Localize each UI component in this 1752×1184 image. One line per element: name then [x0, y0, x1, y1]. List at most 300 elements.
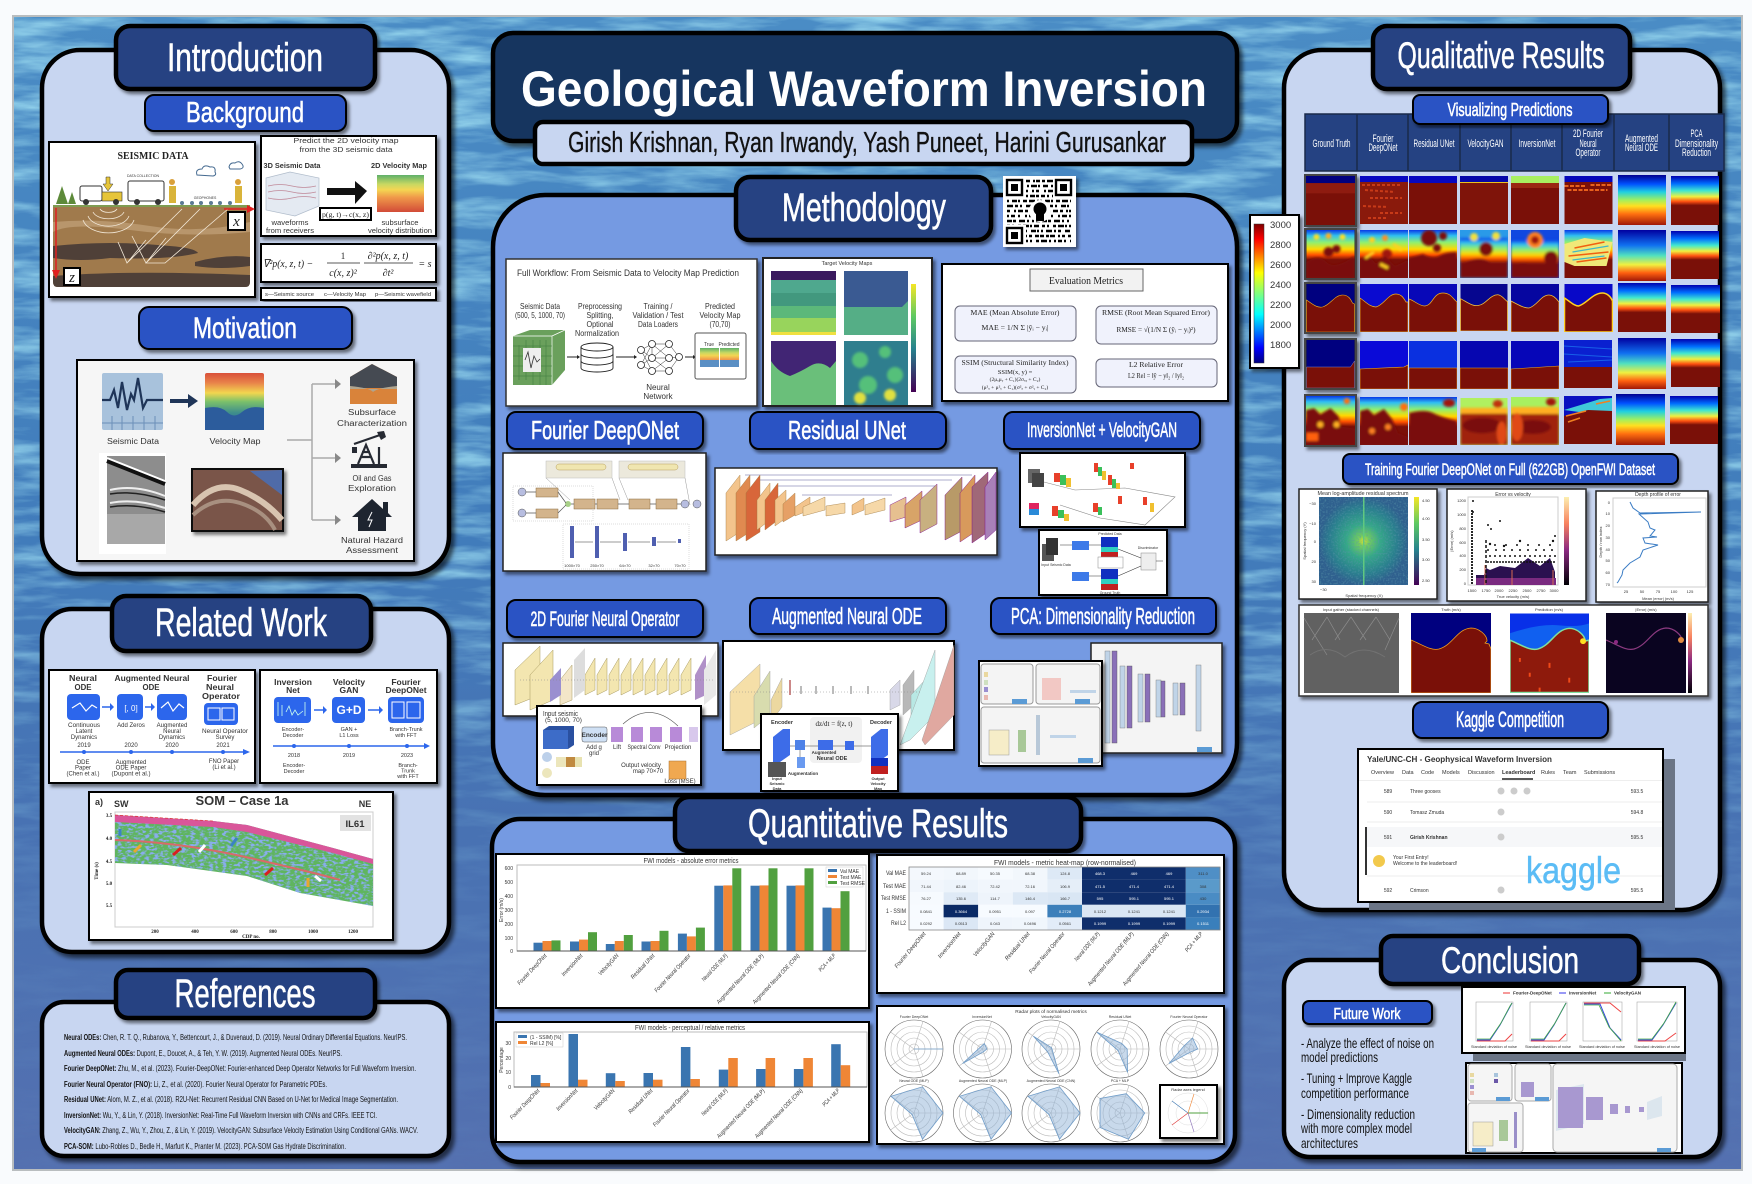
authors [535, 122, 1192, 164]
radar charts: Residual UNet [1109, 1015, 1131, 1019]
figure: seismic data acquisition scene: x [232, 214, 240, 230]
figure: evaluation metrics: RMSE = √(1/N Σ (ŷᵢ − yᵢ)²) [1116, 325, 1196, 334]
prediction grid: row 2 [1305, 229, 1719, 281]
prediction table header: Neural ODE [1625, 142, 1658, 154]
bar chart: perceptual metrics: Percentage [499, 1047, 505, 1073]
prediction table header: VelocityGAN [1468, 138, 1504, 150]
heat map: metric heat-map: Neural ODE (MLP) [1074, 931, 1102, 963]
velocity colour bar: 2600 [1270, 260, 1291, 271]
timeline: neural ODE lineage: Add Zeros [117, 723, 145, 729]
chart: error vs velocity: Error vs velocity [1495, 492, 1531, 498]
heading: qualitative results: Qualitative Results [1398, 35, 1604, 76]
chart: noise robustness curves: InversionNet [1569, 990, 1597, 996]
figure: evaluation metrics: SSIM(x, y) = [998, 369, 1033, 376]
chart: error vs velocity: 2000 [1495, 588, 1504, 593]
diagram: encoder / neural ODE / decoder: Input [772, 776, 783, 781]
chart: residual spectrum [1299, 489, 1437, 599]
figure: predict velocity map from seismic data: from receivers [266, 228, 315, 235]
figure: kaggle leaderboard: Three gooses [1410, 789, 1441, 795]
chart: residual spectrum: 20 [1312, 559, 1317, 564]
figure: predict velocity map from seismic data: velocity distribution [368, 228, 432, 235]
heat map: metric heat-map: 471.5 [1095, 884, 1106, 889]
bar chart: absolute error metrics: Fourier Neural Operator [654, 953, 693, 994]
timeline: inversion models: with FFT [394, 733, 417, 739]
heat map: metric heat-map: 59.24 [921, 871, 932, 876]
wave equation: 1 [341, 251, 345, 261]
chart: error vs velocity: 3000 [1550, 588, 1559, 593]
figure: predict velocity map from seismic data: from the 3D seismic data [300, 145, 393, 154]
heading: conclusion: Conclusion [1441, 940, 1579, 981]
chart: depth profile of error: 30 [1606, 535, 1611, 540]
timeline: inversion models: Velocity [333, 677, 365, 687]
heat map: metric heat-map: 0.097 [1025, 909, 1036, 914]
figure: evaluation metrics: MAE = 1/N Σ |ŷᵢ − yᵢ| [982, 323, 1048, 332]
prediction table header: 2D Fourier [1573, 128, 1603, 140]
heat map: metric heat-map: 0.3664 [955, 909, 968, 914]
heat map: metric heat-map: 595 [1097, 896, 1104, 901]
heading: quantitative results [675, 797, 1081, 851]
bar chart: absolute error metrics: Error (m/s) [499, 898, 505, 922]
figure: target velocity maps [763, 258, 932, 406]
chart: residual spectrum: 2.50 [1422, 578, 1431, 583]
figure: kaggle leaderboard: Your First Entry! [1393, 855, 1429, 861]
bar chart: perceptual metrics [496, 1022, 869, 1142]
diagram: Fourier DeepONet architecture [503, 453, 706, 571]
heat map: metric heat-map: 166.7 [1060, 896, 1071, 901]
heading: Augmented Neural ODE [750, 598, 946, 634]
heading: conclusion [1381, 936, 1639, 984]
figure: evaluation metrics [942, 264, 1228, 401]
diagram: Fourier DeepONet architecture: 1000×70 [564, 563, 581, 568]
bar chart: absolute error metrics: Test MAE [840, 875, 862, 881]
future work list: - Analyze the effect of noise on [1301, 1035, 1434, 1051]
diagram: FNO pipeline: Loss (MSE) [664, 779, 696, 785]
reference list: PCA-SOM: Lubo-Robles D., Bedle H., Marfurt K., Pranter M. (2023). PCA-SOM Gas Hydrate Discrimination. [64, 1142, 346, 1151]
chart: error vs velocity: 600 [1459, 540, 1467, 545]
velocity colour bar: 2200 [1270, 300, 1291, 311]
heading: references: References [174, 972, 316, 1016]
figure: seismic data acquisition scene: SEISMIC DATA [118, 151, 189, 162]
timeline: neural ODE lineage: ODE [142, 682, 160, 692]
figure: evaluation metrics: MAE (Mean Absolute Error) [970, 308, 1060, 317]
figure: predict velocity map from seismic data [261, 136, 436, 236]
bar chart: perceptual metrics: 0 [508, 1085, 511, 1091]
heat map: metric heat-map: 68.38 [1025, 871, 1036, 876]
radar charts: Fourier DeepONet [900, 1015, 928, 1019]
diagram: FNO pipeline: Projection [665, 745, 691, 751]
prediction table header: Ground Truth [1312, 138, 1350, 150]
figure: SOM case 1a seismic section: 5.0 [106, 882, 113, 887]
radar axis legend [1160, 1085, 1217, 1138]
heat map: metric heat-map: 1 - SSIM [886, 908, 906, 915]
figure: seismic data acquisition scene: GEOPHONES [194, 196, 217, 200]
bar chart: absolute error metrics: PCA + MLP [818, 953, 837, 973]
reference list: Fourier Neural Operator (FNO): Li, Z., et al. (2020). Fourier Neural Operator for Parametric PDEs. [64, 1080, 327, 1089]
chart: residual spectrum: 30 [1312, 579, 1317, 584]
diagram: VelocityGAN architecture [1039, 530, 1167, 595]
prediction grid: row 1 [1305, 175, 1719, 226]
heat map: metric heat-map: 0.0496 [1024, 921, 1037, 926]
diagram: Fourier DeepONet architecture: 64×70 [619, 563, 631, 568]
chart: error vs velocity: 400 [1459, 553, 1467, 558]
prediction table header: InversionNet [1518, 138, 1556, 150]
figure: kaggle leaderboard: Yale/UNC-CH - Geophysical Waveform Inversion [1367, 755, 1552, 764]
chart: error vs velocity: 0 [1464, 581, 1467, 586]
heading: qualitative results [1373, 26, 1630, 89]
diagram: FNO pipeline: Encoder [581, 732, 608, 739]
chart: residual spectrum: 0 [1314, 539, 1317, 544]
timeline: neural ODE lineage: Augmented [116, 760, 146, 766]
figure: full workflow: Splitting, [586, 311, 614, 320]
prediction grid: row 3 [1305, 283, 1720, 333]
timeline: neural ODE lineage: FNO Paper [209, 759, 239, 765]
figure: SOM case 1a seismic section: 4.0 [106, 837, 113, 842]
equation legend: c—Velocity Map [324, 292, 366, 298]
chart: error vs velocity: 200 [1459, 567, 1467, 572]
timeline: inversion models: 2023 [401, 753, 413, 759]
bar chart: perceptual metrics: 10 [505, 1070, 511, 1076]
bar chart: absolute error metrics: Fourier DeepONet [517, 953, 549, 987]
heat map: metric heat-map: Augmented Neural ODE (CNN) [1122, 931, 1171, 988]
figure: SOM case 1a seismic section: 600 [230, 930, 238, 935]
heat map: metric heat-map: 595.1 [1129, 896, 1140, 901]
figure: gather, truth, prediction and error strip: Prediction (m/s) [1535, 607, 1564, 612]
bar chart: perceptual metrics: (1 - SSIM) [%] [530, 1035, 562, 1041]
timeline: neural ODE lineage: Neural [163, 729, 181, 735]
timeline: neural ODE lineage: Dynamics [159, 735, 185, 741]
radar axis legend: Radar axes legend [1171, 1087, 1205, 1092]
figure: motivation flow: Natural Hazard [341, 536, 403, 545]
figure: SOM case 1a seismic section: a) [95, 797, 103, 807]
heading: Residual UNet: Residual UNet [788, 415, 907, 445]
heat map: metric heat-map: InversionNet [937, 931, 963, 960]
heading: Residual UNet [750, 412, 946, 449]
chart: residual spectrum: 3.00 [1422, 557, 1431, 562]
figure: gather, truth, prediction and error strip: Truth (m/s) [1441, 607, 1461, 612]
timeline: neural ODE lineage: Fourier [207, 673, 238, 683]
heat map: metric heat-map: 430 [1200, 896, 1207, 901]
figure: full workflow: Preprocessing [578, 302, 622, 311]
figure: kaggle leaderboard: Girish Krishnan [1410, 835, 1448, 841]
diagram: encoder / neural ODE / decoder: Decoder [870, 720, 893, 726]
chart: depth profile of error: Mean |error| (m/s) [1642, 596, 1675, 601]
equation legend [261, 288, 436, 300]
reference list [64, 1033, 418, 1151]
bar chart: absolute error metrics: InversionNet [561, 953, 585, 978]
panel: conclusion [1284, 936, 1720, 1157]
diagram: FNO pipeline: grid [589, 751, 599, 757]
bar chart: perceptual metrics: Fourier DeepONet [509, 1088, 542, 1121]
heading: visualizing predictions [1413, 95, 1608, 124]
figure: SOM case 1a seismic section [89, 792, 393, 940]
chart: error vs velocity [1447, 489, 1586, 601]
velocity colour bar: 1800 [1270, 340, 1291, 351]
chart: error vs velocity: 2500 [1523, 588, 1532, 593]
diagram: encoder / neural ODE / decoder: dz/dt = f(z, t) [816, 720, 853, 728]
wave equation: c(x, z)² [329, 268, 358, 279]
heat map: metric heat-map: 146.4 [1025, 896, 1036, 901]
figure: predict velocity map from seismic data: p(g, t)→c(x, z) [322, 211, 370, 219]
future work list: architectures [1301, 1135, 1358, 1151]
timeline: inversion models: DeepONet [385, 685, 427, 695]
heat map: metric heat-map: 469 [1131, 871, 1138, 876]
figure: gather, truth, prediction and error strip [1299, 605, 1708, 696]
timeline: inversion models: Fourier [391, 677, 421, 687]
figure: full workflow: (70,70) [710, 320, 731, 329]
heat map: metric heat-map: Val MAE [886, 870, 907, 877]
diagram: VelocityGAN architecture: Ground Truth [1100, 591, 1120, 595]
radar charts: Augmented Neural ODE (CNN) [1027, 1079, 1075, 1083]
wave equation: ∂²p(x, z, t) [368, 251, 409, 262]
bar chart: absolute error metrics: 400 [505, 894, 513, 900]
bar chart: absolute error metrics: 300 [505, 908, 513, 914]
figure: SOM case 1a seismic section: 4.5 [106, 860, 113, 865]
radar charts: Augmented Neural ODE (MLP) [959, 1079, 1007, 1083]
radar charts: InversionNet [972, 1015, 992, 1019]
figure: kaggle leaderboard: 595.5 [1631, 888, 1643, 894]
figure: kaggle leaderboard: Overview [1371, 770, 1394, 776]
figure: motivation flow: Exploration [348, 484, 396, 493]
timeline: neural ODE lineage: (Dupont et al.) [112, 772, 150, 778]
heat map: metric heat-map: 0.1999 [1128, 921, 1141, 926]
figure: kaggle leaderboard: 592 [1384, 888, 1392, 894]
heading: related work: Related Work [155, 601, 328, 645]
figure: SOM case 1a seismic section: CDP no. [242, 935, 261, 940]
timeline: inversion models: 2019 [343, 753, 355, 759]
chart: depth profile of error: 50 [1606, 558, 1611, 563]
figure: SOM case 1a seismic section: NE [359, 799, 371, 809]
heat map: metric heat-map: VelocityGAN [973, 931, 997, 958]
heat map: metric heat-map: 469 [1166, 871, 1173, 876]
heading: future work [1303, 1001, 1432, 1024]
heat map: metric heat-map: 0.0292 [920, 921, 933, 926]
figure: evaluation metrics: L2 Relative Error [1129, 360, 1184, 369]
panel: qualitative results [1250, 26, 1724, 910]
figure: predict velocity map from seismic data: waveforms [270, 220, 309, 227]
timeline: inversion models: Encoder- [282, 727, 304, 733]
figure: SOM case 1a seismic section: 200 [151, 930, 159, 935]
radar charts: Fourier Neural Operator [1170, 1015, 1208, 1019]
figure: gather, truth, prediction and error strip: Input gather (stacked channels) [1323, 607, 1380, 612]
radar charts: Radar plots of normalised metrics [1015, 1009, 1087, 1015]
heat map: metric heat-map: Test RMSE [881, 895, 907, 902]
figure: predict velocity map from seismic data: 2D Velocity Map [371, 163, 427, 170]
heat map: metric heat-map: 0.1511 [1197, 921, 1210, 926]
figure: evaluation metrics: SSIM (Structural Similarity Index) [962, 358, 1069, 367]
heat map: metric heat-map: 0.0513 [955, 921, 968, 926]
heat map: metric heat-map [877, 855, 1224, 993]
chart: error vs velocity: 800 [1459, 526, 1467, 531]
figure: kaggle leaderboard: Discussion [1468, 770, 1495, 776]
figure: full workflow: Predicted [718, 342, 740, 348]
chart: depth profile of error: 20 [1606, 523, 1611, 528]
diagram: VelocityGAN architecture: Discriminator [1138, 546, 1159, 550]
timeline: inversion models: Encoder- [283, 763, 305, 769]
figure: kaggle leaderboard: Crimson [1410, 888, 1429, 894]
figure: target velocity maps: Target Velocity Maps [822, 261, 873, 267]
heading: training Fourier DeepONet [1343, 454, 1678, 484]
figure: evaluation metrics: (μ²ₓ + μ²ᵧ + C₁)(σ²ₓ + σ²ᵧ + C₂) [982, 384, 1048, 391]
figure: kaggle leaderboard: kaggle [1526, 850, 1621, 891]
heading: methodology [736, 177, 991, 240]
chart: noise robustness curves: VelocityGAN [1614, 990, 1641, 996]
figure: kaggle leaderboard: Leaderboard [1502, 770, 1535, 776]
heat map: metric heat-map: 471.4 [1129, 884, 1140, 889]
diagram: encoder / neural ODE / decoder: Augmentation [788, 771, 818, 776]
bar chart: absolute error metrics: 600 [505, 866, 513, 872]
heading: background: Background [186, 97, 304, 129]
bar chart: absolute error metrics: Val MAE [840, 869, 860, 875]
chart: depth profile of error: 0 [1608, 500, 1611, 505]
diagram: encoder / neural ODE / decoder: Encoder [771, 720, 794, 726]
panel: title banner [493, 33, 1237, 164]
figure: motivation flow: Velocity Map [210, 437, 261, 446]
heading: PCA dimensionality reduction [991, 598, 1216, 634]
timeline: neural ODE lineage: [, 0] [124, 704, 138, 713]
heading: InversionNet + VelocityGAN [1004, 412, 1200, 449]
figure: evaluation metrics: L2 Rel = ‖ŷ − y‖₂ / ‖y‖₂ [1128, 371, 1184, 380]
figure: kaggle leaderboard: Submissions [1584, 770, 1615, 776]
chart: depth profile of error [1596, 491, 1708, 602]
timeline: inversion models: Trunk [401, 768, 415, 774]
prediction grid: row 4 [1305, 338, 1720, 389]
heat map: metric heat-map: 72.42 [990, 884, 1001, 889]
timeline: neural ODE lineage: (Chen et al.) [66, 772, 100, 778]
figure: predict velocity map from seismic data: 3D Seismic Data [264, 163, 321, 170]
bar chart: absolute error metrics [496, 854, 869, 1008]
figure: kaggle leaderboard: 594.8 [1631, 810, 1643, 816]
figure: kaggle leaderboard: 593.5 [1631, 789, 1643, 795]
heat map: metric heat-map: 0.1241 [1163, 909, 1176, 914]
timeline: inversion models: Inversion [274, 677, 312, 687]
prediction table header: Neural [1580, 138, 1596, 150]
bar chart: perceptual metrics: Rel L2 [%] [530, 1041, 554, 1047]
heat map: metric heat-map: 0.2728 [1059, 909, 1072, 914]
timeline: inversion models: Branch-Trunk [389, 727, 423, 733]
bar chart: perceptual metrics: Residual UNet [628, 1088, 655, 1115]
figure: evaluation metrics: Evaluation Metrics [1049, 276, 1123, 287]
chart: depth profile of error: 125 [1687, 589, 1694, 594]
wave equation: ∇²p(x, z, t) − [263, 258, 313, 270]
heading: PCA dimensionality reduction: PCA: Dimensionality Reduction [1011, 603, 1195, 629]
chart: noise robustness curves: Standard deviation of noise [1471, 1045, 1517, 1049]
heading: references [116, 970, 375, 1018]
chart: noise robustness curves: Fourier-DeepONet [1513, 990, 1552, 996]
chart: depth profile of error: 75 [1656, 589, 1661, 594]
prediction table header: Fourier [1372, 133, 1394, 145]
future work list: model predictions [1301, 1049, 1378, 1065]
chart: error vs velocity: 1200 [1457, 498, 1467, 503]
reference list: Fourier DeepONet: Zhu, M., et al. (2023). Fourier-DeepONet: Fourier-enhanced Deep Operator Networks for Full Waveform Inversion. [64, 1064, 416, 1073]
diagram: encoder / neural ODE / decoder: Output [871, 776, 885, 781]
timeline: neural ODE lineage: Operator [202, 691, 241, 701]
heading: Augmented Neural ODE: Augmented Neural ODE [772, 603, 922, 629]
chart: residual spectrum: Mean log-amplitude residual spectrum [1318, 491, 1409, 497]
bar chart: perceptual metrics: FWI models - perceptual / relative metrics [635, 1025, 745, 1032]
prediction table header: Operator [1576, 147, 1601, 159]
chart: residual spectrum: −30 [1320, 587, 1328, 592]
figure: kaggle leaderboard: Code [1421, 770, 1434, 776]
heat map: metric heat-map: 106.9 [1060, 884, 1071, 889]
figure: full workflow: Normalization [575, 329, 619, 338]
figure: SOM case 1a seismic section: 1000 [308, 930, 318, 935]
diagram: FNO pipeline: Output velocity [621, 763, 661, 769]
velocity colour bar: 2800 [1270, 240, 1291, 251]
panel: quantitative results [492, 797, 1235, 1162]
figure: SOM case 1a seismic section: 5.5 [106, 904, 113, 909]
figure: kaggle leaderboard: 591 [1384, 835, 1392, 841]
diagram: 2D FNO layers [503, 643, 718, 716]
title: Geological Waveform Inversion [521, 61, 1207, 117]
heat map: metric heat-map: 595.1 [1164, 896, 1175, 901]
heading: 2D Fourier Neural Operator [507, 600, 703, 637]
heat map: metric heat-map: PCA + MLP [1185, 931, 1205, 954]
heat map: metric heat-map: 114.7 [990, 896, 1001, 901]
timeline: neural ODE lineage: Neural Operator [202, 729, 248, 735]
timeline: inversion models: GAN + [341, 727, 357, 733]
timeline: neural ODE lineage: 2021 [216, 743, 230, 749]
wave equation: ∂t² [383, 268, 394, 279]
figure: seismic data acquisition scene [49, 142, 255, 297]
diagram: dimensionality reduction architecture [1466, 1063, 1682, 1153]
chart: depth profile of error: Depth / row index [1598, 526, 1603, 558]
diagram: Augmented Neural ODE layers [723, 641, 954, 750]
heat map: metric heat-map: 72.16 [1025, 884, 1036, 889]
bar chart: absolute error metrics: 0 [510, 949, 513, 955]
equation legend: s—Seismic source [265, 292, 314, 298]
heat map: metric heat-map: 82.46 [956, 884, 967, 889]
heading: motivation [139, 307, 352, 349]
heading: future work: Future Work [1334, 1006, 1401, 1023]
timeline: neural ODE lineage: 2019 [77, 743, 91, 749]
figure: kaggle leaderboard: Data [1402, 770, 1415, 776]
figure: SOM case 1a seismic section: 800 [269, 930, 277, 935]
chart: depth profile of error: 40 [1606, 547, 1611, 552]
figure: kaggle leaderboard: Tomasz Zmuda [1410, 810, 1444, 816]
heat map: metric heat-map: 0.2934 [1197, 909, 1210, 914]
figure: SOM case 1a seismic section: IL61 [345, 819, 365, 830]
diagram: FNO pipeline: (5, 1000, 70) [545, 717, 582, 724]
heading: 2D Fourier Neural Operator: 2D Fourier Neural Operator [530, 608, 680, 631]
bar chart: perceptual metrics: Fourier Neural Operator [652, 1088, 692, 1128]
heat map: metric heat-map: Rel L2 [891, 920, 906, 927]
figure: full workflow: Neural [646, 383, 670, 392]
figure: evaluation metrics: RMSE (Root Mean Squared Error) [1102, 308, 1211, 317]
prediction table header: Reduction [1682, 147, 1711, 159]
chart: error vs velocity: 2250 [1509, 588, 1518, 593]
timeline: neural ODE lineage: Augmented Neural [114, 673, 190, 683]
timeline: inversion models: L1 Loss [339, 733, 359, 739]
bar chart: absolute error metrics: FWI models - absolute error metrics [644, 858, 739, 865]
chart: residual spectrum: Spatial frequency (X) [1345, 593, 1383, 598]
timeline: inversion models: Net [286, 685, 300, 695]
chart: residual spectrum: 4.00 [1422, 516, 1431, 521]
chart: depth profile of error: 25 [1624, 589, 1629, 594]
heat map: metric heat-map: 0.0841 [920, 909, 933, 914]
bar chart: perceptual metrics: Neural ODE (MLP) [701, 1088, 729, 1118]
reference list: InversionNet: Wu, Y., & Lin, Y. (2018). InversionNet: Real-Time Full Waveform Inversion with CNNs and CRFs. IEEE TCI. [64, 1111, 377, 1120]
velocity colour bar [1250, 215, 1299, 368]
diagram: FNO pipeline: Input seismic [543, 711, 578, 718]
reference list: Residual UNet: Alom, M. Z., et al. (2018). R2U-Net: Recurrent Residual CNN Based on U-Net for Medical Image Segmentation. [64, 1095, 398, 1104]
radar charts [877, 1006, 1224, 1144]
equation legend: p—Seismic wavefield [375, 292, 431, 298]
velocity colour bar: 2400 [1270, 280, 1291, 291]
prediction table header: Residual UNet [1414, 138, 1454, 150]
timeline: inversion models: Decoder [283, 733, 304, 739]
diagram: PCA decoder bars [1091, 643, 1222, 753]
future work list: competition performance [1301, 1085, 1409, 1101]
